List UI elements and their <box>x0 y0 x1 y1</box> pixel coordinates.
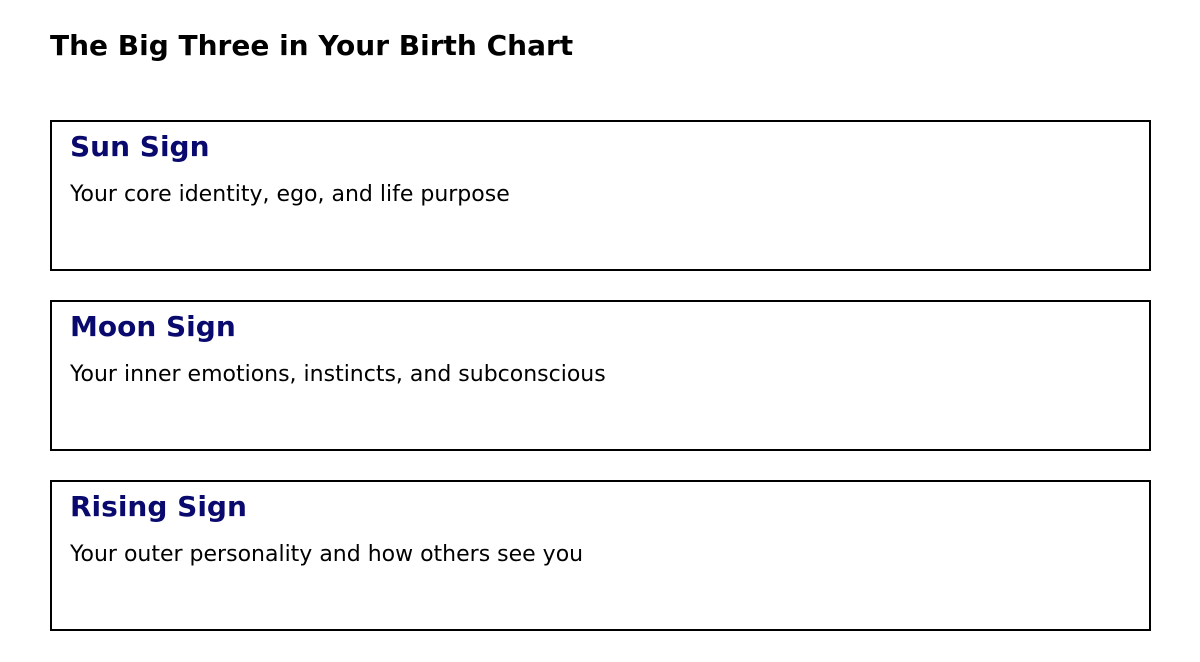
text: moon description: Your inner emotions, instincts, and subconscious <box>70 362 606 387</box>
panel: sun sign <box>50 120 1151 271</box>
heading: rising sign: Rising Sign <box>70 490 247 523</box>
text: rising description: Your outer personality and how others see you <box>70 542 583 567</box>
text: sun description: Your core identity, ego, and life purpose <box>70 182 510 207</box>
panel: rising sign <box>50 480 1151 631</box>
heading: sun sign: Sun Sign <box>70 130 210 163</box>
title: The Big Three in Your Birth Chart <box>50 29 573 62</box>
heading: moon sign: Moon Sign <box>70 310 236 343</box>
panel: moon sign <box>50 300 1151 451</box>
